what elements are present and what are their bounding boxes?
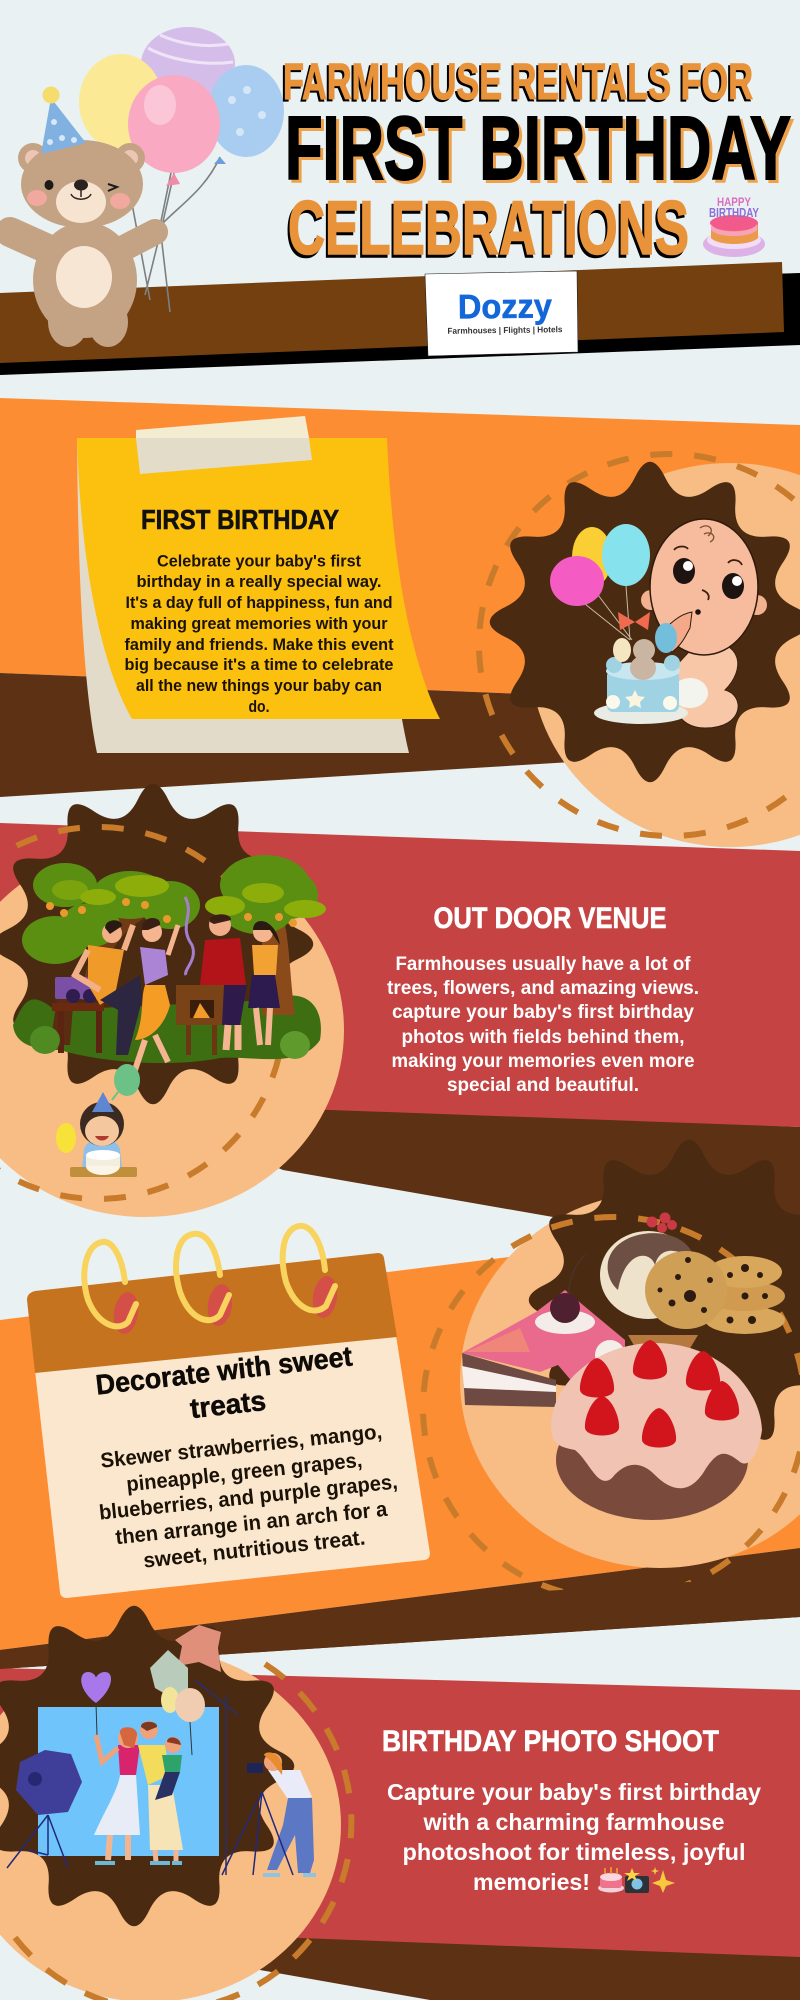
father (138, 1721, 183, 1862)
brown lower band (250, 1925, 800, 2000)
body text: photos with fields behind them, (402, 1027, 684, 1048)
body text: capture your baby's first birthday (392, 1002, 694, 1023)
body text: special and beautiful. (447, 1075, 639, 1096)
icon: cake emoji (598, 1867, 624, 1892)
body text: Celebrate your baby's first (157, 552, 361, 570)
body text (124, 552, 394, 716)
red band (0, 823, 800, 1127)
illustration: cookies and ice cream (600, 1212, 785, 1365)
orange band (0, 1221, 800, 1650)
icon: birthday cake: BIRTHDAY (709, 205, 759, 220)
brown band (0, 1548, 800, 1669)
peach circle (530, 463, 800, 847)
note yellow sheet (77, 438, 440, 719)
body text: photoshoot for timeless, joyful (402, 1839, 746, 1865)
body text: all the new things your baby can (136, 676, 382, 695)
mother (94, 1727, 140, 1860)
card header (27, 1253, 397, 1373)
top brown strip (0, 1575, 800, 1669)
panel: sweet treats (0, 1140, 800, 1669)
dashed ring (13, 1664, 351, 2000)
heading: Decorate with sweet (94, 1341, 354, 1401)
heading: FIRST BIRTHDAY (141, 504, 339, 535)
icon: birthday cake: HAPPY (717, 195, 751, 209)
illustration: baby with balloons and cake (550, 519, 767, 728)
note back sheet (77, 438, 409, 753)
panel: header (0, 27, 800, 375)
star backdrop (0, 1606, 294, 1926)
logo tagline: Farmhouses | Flights | Hotels (447, 324, 563, 336)
dashed ring (423, 1217, 800, 1599)
heading: BIRTHDAY PHOTO SHOOT (382, 1725, 719, 1758)
panel: outdoor venue (0, 784, 800, 1260)
peach circle (0, 1648, 341, 2000)
balloon bunch (79, 27, 284, 312)
body text: trees, flowers, and amazing views. (387, 978, 699, 999)
peach circle (0, 843, 344, 1217)
teddy bear (10, 86, 155, 347)
photographer (222, 1752, 316, 1875)
body text: memories! (473, 1869, 590, 1895)
star backdrop (529, 1140, 800, 1460)
dashed ring (479, 454, 800, 836)
body text: family and friends. Make this event (124, 635, 394, 654)
panel: birthday photo shoot (0, 1575, 800, 2000)
red band (0, 1668, 800, 1957)
tape (136, 416, 312, 474)
body text (98, 1420, 399, 1573)
body text: big because it's a time to celebrate (124, 655, 394, 674)
body text (387, 1779, 761, 1895)
brown band (0, 673, 800, 797)
body text: Farmhouses usually have a lot of (396, 954, 691, 975)
body text: Skewer strawberries, mango, (99, 1420, 383, 1473)
body text: with a charming farmhouse (422, 1809, 724, 1835)
body text: making great memories with your (130, 614, 388, 633)
binder rings (84, 1226, 335, 1326)
peach blob (460, 1192, 800, 1568)
icon: birthday cake (703, 195, 765, 257)
logo card (425, 271, 578, 356)
illustration: strawberry cake (551, 1340, 762, 1520)
body text: pineapple, green grapes, (125, 1449, 363, 1496)
illustration: outdoor party (13, 855, 326, 1070)
orange band (0, 398, 800, 705)
brown lower band (0, 1090, 800, 1260)
body text: It's a day full of happiness, fun and (126, 593, 392, 612)
illustration: pink cake slice (462, 1255, 625, 1407)
body text: sweet, nutritious treat. (142, 1526, 366, 1573)
heading (94, 1341, 354, 1424)
logo wordmark: Dozzy (458, 288, 552, 326)
icon: camera emoji (624, 1868, 649, 1893)
child (155, 1737, 182, 1800)
note card (27, 1226, 424, 1592)
heading: OUT DOOR VENUE (434, 902, 666, 935)
body text: Capture your baby's first birthday (387, 1779, 761, 1805)
ring holes (111, 1275, 340, 1335)
panel: first birthday (0, 398, 800, 847)
body text: blueberries, and purple grapes, (98, 1470, 399, 1525)
body text (387, 954, 699, 1096)
star backdrop (0, 784, 313, 1104)
heading: treats (188, 1385, 267, 1424)
dashed ring (0, 827, 284, 1199)
body text: then arrange in an arch for a (114, 1498, 389, 1549)
illustration: family photo shoot (7, 1625, 316, 1875)
star backdrop (490, 462, 800, 782)
header brown band (0, 262, 784, 363)
illustration: boy with birthday cake (56, 1064, 140, 1177)
body text: making your memories even more (392, 1051, 694, 1072)
body text: do. (248, 697, 270, 716)
icon: sparkles emoji (651, 1867, 675, 1893)
header black band (0, 273, 800, 375)
body text: birthday in a really special way. (136, 572, 382, 591)
